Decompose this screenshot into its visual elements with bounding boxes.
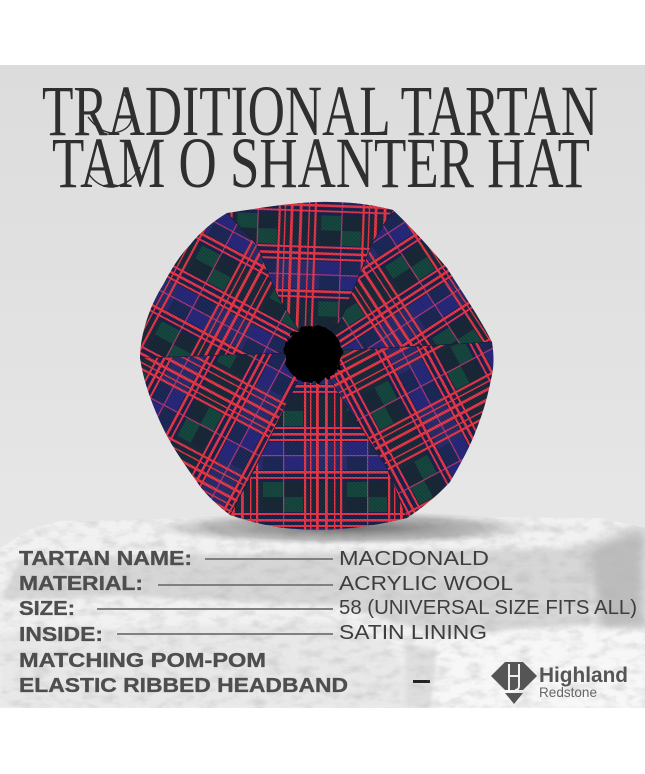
tartan hat <box>140 202 494 530</box>
panel: top <box>227 202 394 332</box>
panel: lower right <box>330 342 494 518</box>
pom-pom <box>284 325 342 383</box>
spec row: material: MATERIAL: <box>19 573 143 595</box>
spec row: inside <box>19 622 487 646</box>
panel: lower left <box>140 353 298 516</box>
rock podium <box>0 515 645 708</box>
spec row: tartan name: TARTAN NAME: <box>19 548 192 570</box>
feature: elastic headband: ELASTIC RIBBED HEADBAND <box>19 675 348 697</box>
panel: upper left <box>140 213 299 358</box>
spec row: inside: SATIN LINING <box>339 622 487 644</box>
hat shadow <box>150 511 540 545</box>
logo: Highland Redstone: Redstone <box>539 684 597 700</box>
spec row: material <box>19 573 513 595</box>
spec row: tartan name: MACDONALD <box>339 548 489 570</box>
title <box>42 71 598 203</box>
spec row: size <box>19 597 637 620</box>
panel: bottom <box>230 378 408 530</box>
panel: upper right <box>332 210 492 350</box>
spec row: size: SIZE: <box>19 598 75 620</box>
feature: matching pom-pom: MATCHING POM-POM <box>19 650 266 672</box>
spec row: material: ACRYLIC WOOL <box>339 573 513 595</box>
logo: Highland Redstone <box>491 662 628 704</box>
twill texture <box>130 195 500 535</box>
spec row: size: 58 (UNIVERSAL SIZE FITS ALL) <box>339 597 637 619</box>
spec row: tartan name <box>19 548 489 570</box>
logo: Highland Redstone: Highland <box>539 664 628 687</box>
spec row: inside: INSIDE: <box>19 624 103 646</box>
